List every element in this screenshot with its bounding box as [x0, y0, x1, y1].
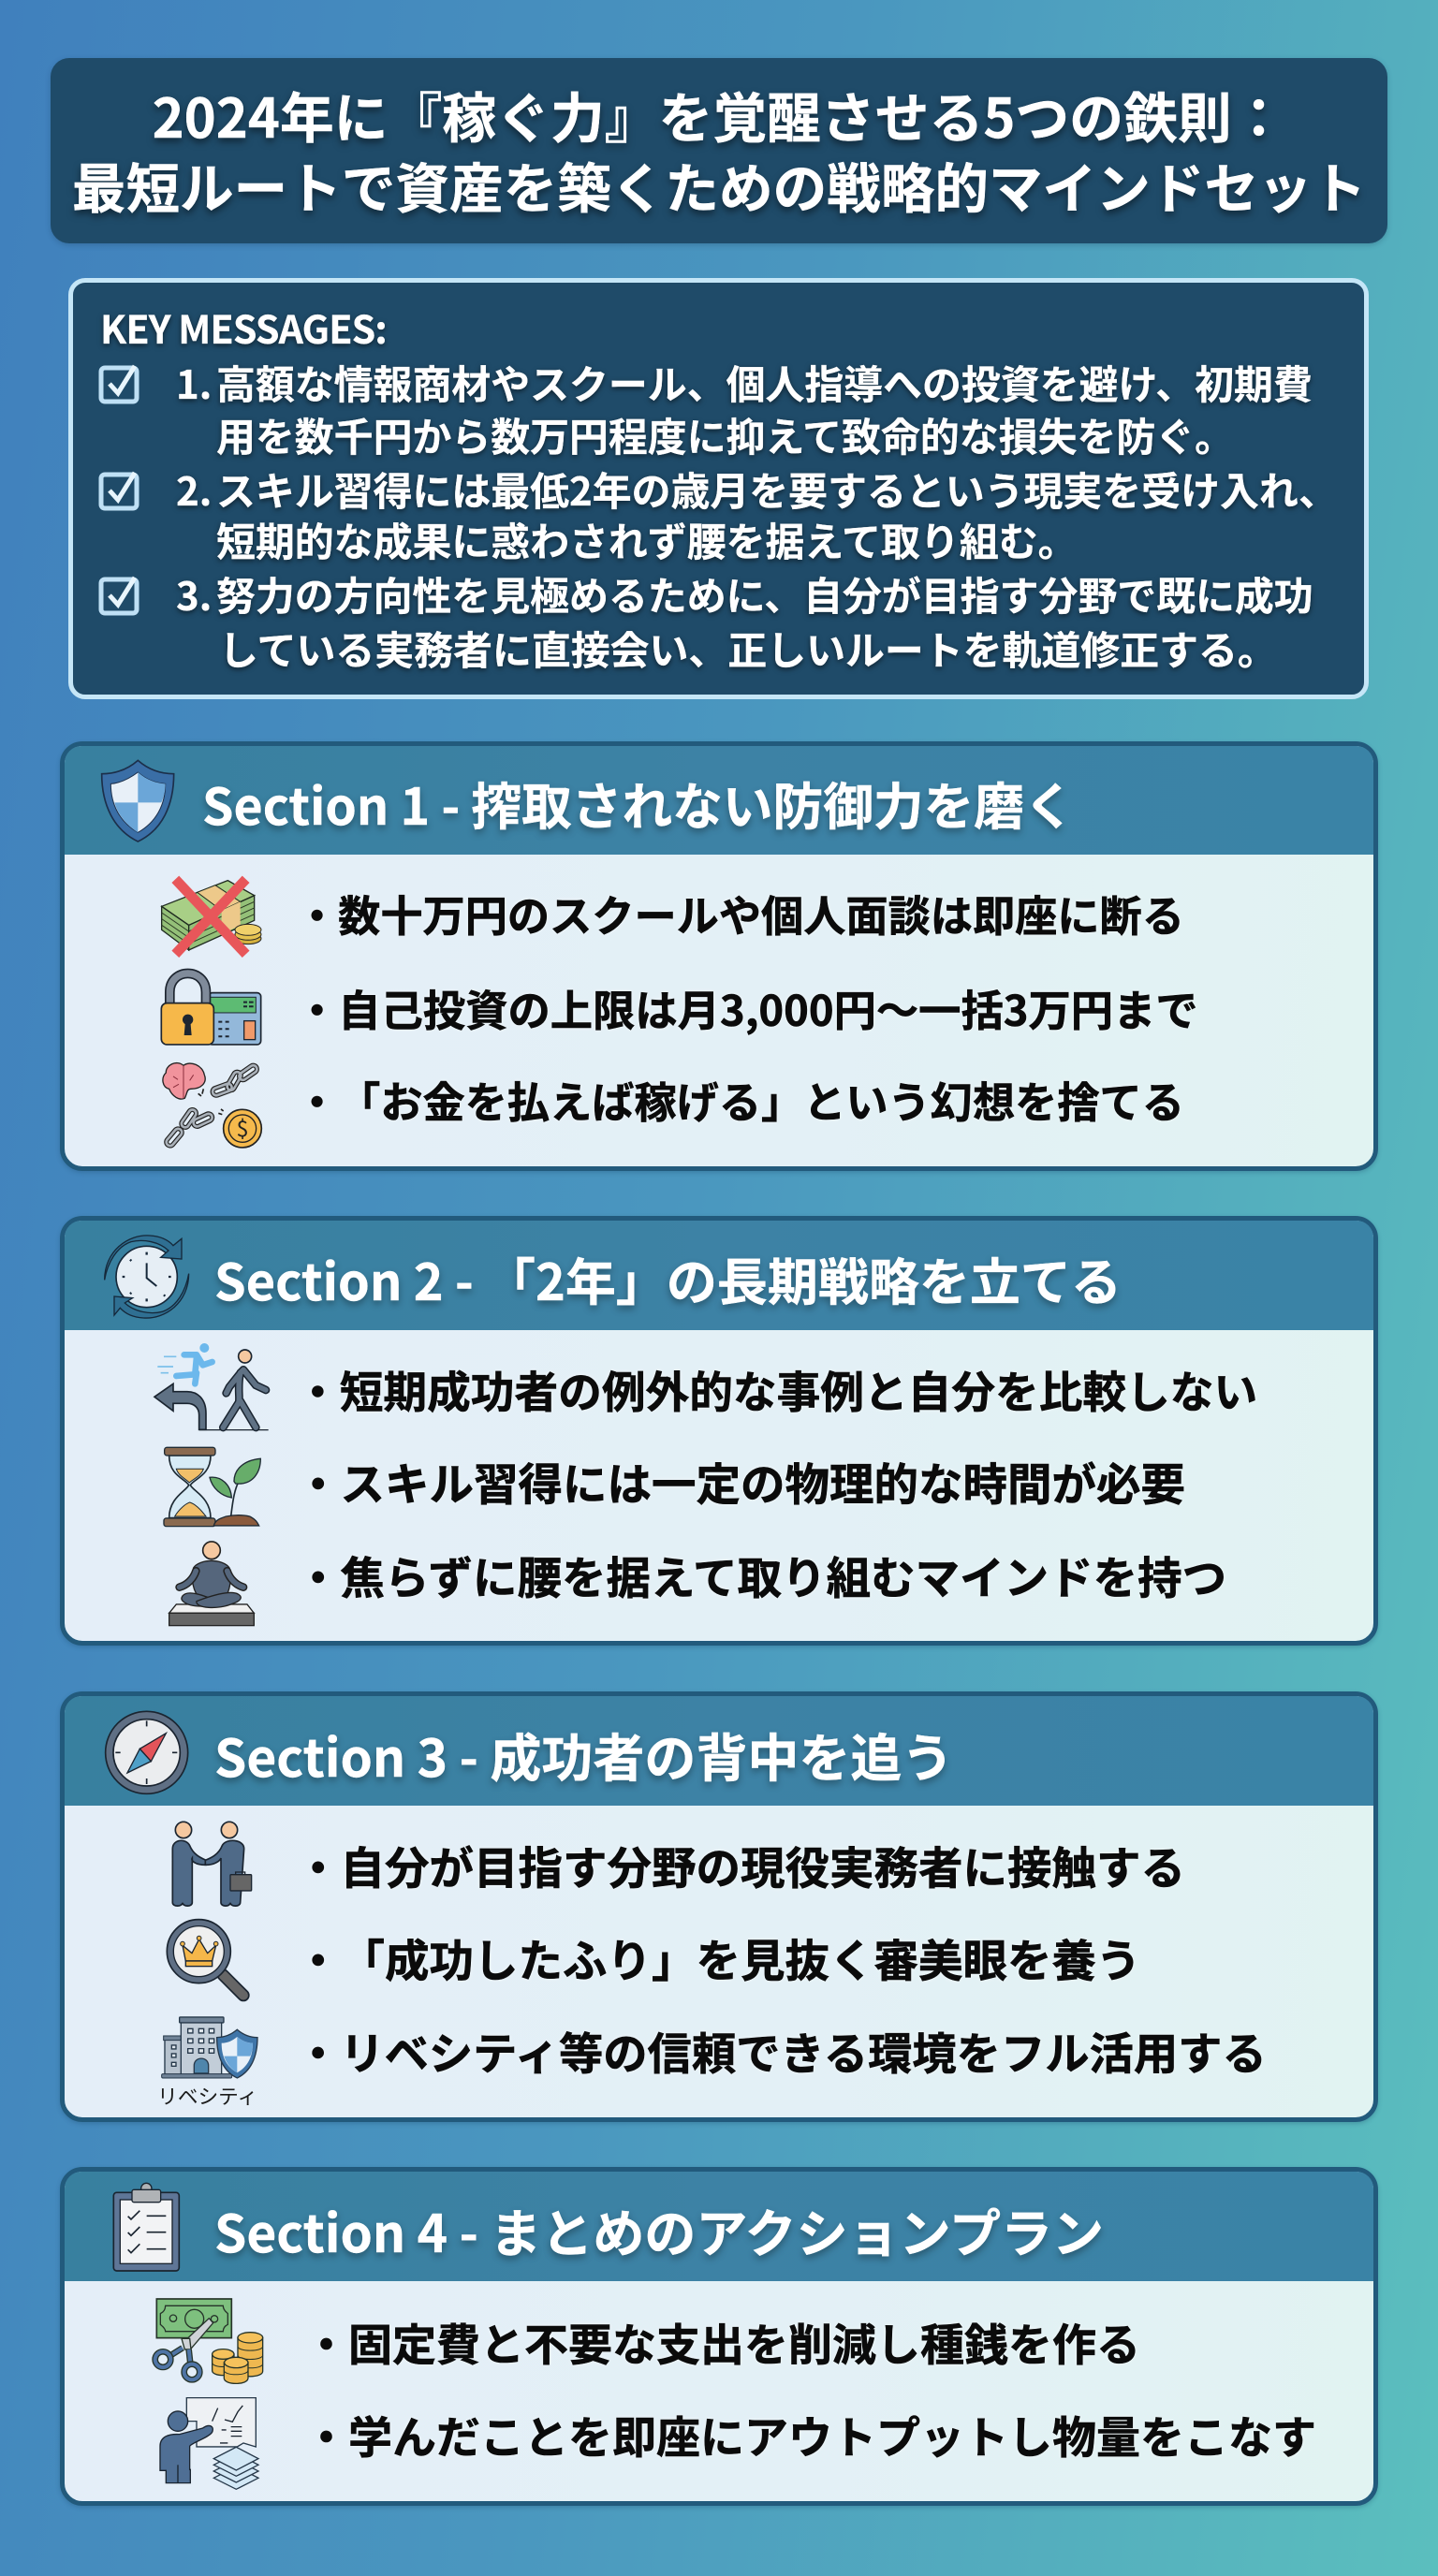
icon: scissors cutting bill and coins	[154, 2298, 262, 2383]
icon: checkbox 2	[99, 472, 139, 511]
panel: section 4	[60, 2167, 1378, 2506]
section 4 bullet 1: ・固定費と不要な支出を削減し種銭を作る	[304, 2309, 1140, 2374]
section 2 heading: Section 2 - 「2年」の長期戦略を立てる	[214, 1241, 1122, 1315]
icon: checkbox 3	[99, 577, 139, 616]
section 3 bullet 2: ・「成功したふり」を見抜く審美眼を養う	[296, 1925, 1140, 1990]
section 2 bullet 2: ・スキル習得には一定の物理的な時間が必要	[296, 1449, 1185, 1514]
message 3: 3.	[176, 565, 212, 622]
icon: brain broken chain coin	[162, 1062, 261, 1147]
message 2: スキル習得には最低2年の歳月を要するという現実を受け入れ、	[216, 461, 1338, 518]
section 2 bullet 3: ・焦らずに腰を据えて取り組むマインドを持つ	[296, 1543, 1226, 1607]
message 3	[99, 565, 1314, 677]
icon: hourglass and sprout	[163, 1447, 260, 1526]
icon: clock with arrows	[104, 1235, 188, 1318]
icon: brain broken chain coin: $	[236, 1110, 248, 1142]
key messages heading: KEY MESSAGES:	[100, 299, 387, 355]
panel: section 3	[60, 1691, 1378, 2122]
panel: section 2	[60, 1216, 1378, 1646]
title: 2024年に『稼ぐ力』を覚醒させる5つの鉄則：	[153, 75, 1285, 154]
section 3 icons	[105, 1711, 258, 2110]
icon: compass	[105, 1711, 187, 1793]
message 1: 高額な情報商材やスクール、個人指導への投資を避け、初期費	[216, 354, 1313, 411]
section 4 heading	[65, 2172, 1373, 2281]
icon: presenter and stacked documents	[159, 2397, 257, 2489]
section 2 bullet 1: ・短期成功者の例外的な事例と自分を比較しない	[296, 1358, 1257, 1421]
icon: handshake	[172, 1822, 251, 1906]
section 3 heading	[65, 1696, 1373, 1806]
message 3: 努力の方向性を見極めるために、自分が目指す分野で既に成功	[216, 565, 1313, 622]
icon: checkbox 1	[99, 365, 139, 404]
message 2: 短期的な成果に惑わされず腰を据えて取り組む。	[216, 511, 1077, 568]
section 4 bullet 2: ・学んだことを即座にアウトプットし物量をこなす	[304, 2402, 1316, 2466]
message 3: している実務者に直接会い、正しいルートを軌道修正する。	[219, 620, 1277, 677]
section 2 heading	[65, 1221, 1373, 1330]
section 1 heading	[65, 746, 1373, 855]
icon: money crossed out	[161, 879, 260, 954]
icon: shield	[101, 760, 173, 841]
title: 最短ルートで資産を築くための戦略的マインドセット	[72, 145, 1366, 224]
section 1 icons	[101, 759, 262, 1149]
icon: padlock and calculator	[161, 973, 260, 1044]
section 1 bullet 2: ・自己投資の上限は月3,000円〜一括3万円まで	[296, 977, 1198, 1039]
section 1 heading: Section 1 - 搾取されない防御力を磨く	[202, 768, 1075, 840]
section 2 icons	[104, 1235, 270, 1627]
message 2	[99, 461, 1338, 568]
section 3 bullet 3: ・リベシティ等の信頼できる環境をフル活用する	[296, 2018, 1267, 2083]
icon: magnifier with crown	[167, 1919, 242, 1995]
title	[51, 58, 1387, 243]
message 2: 2.	[176, 461, 212, 518]
section 3 heading: Section 3 - 成功者の背中を追う	[214, 1717, 953, 1792]
icon: runner walker and arrow	[154, 1342, 268, 1429]
panel: key messages	[68, 278, 1369, 699]
panel: section 1	[60, 741, 1378, 1171]
message 1: 1.	[176, 354, 212, 411]
section 3 bullet 1: ・自分が目指す分野の現役実務者に接触する	[296, 1833, 1185, 1897]
icon: clipboard checklist	[113, 2183, 179, 2270]
message 1: 用を数千円から数万円程度に抑えて致命的な損失を防ぐ。	[216, 406, 1234, 463]
section 4 heading: Section 4 - まとめのアクションプラン	[214, 2192, 1104, 2267]
section 1 bullet 1: ・数十万円のスクールや個人面談は即座に断る	[296, 884, 1184, 944]
section 4 icons	[112, 2183, 264, 2490]
icon: meditating person	[169, 1541, 254, 1625]
message 1	[99, 354, 1313, 463]
icon: building with shield and label: リベシティ	[157, 2081, 257, 2110]
section 1 bullet 3: ・「お金を払えば稼げる」という幻想を捨てる	[296, 1070, 1184, 1131]
icon: building with shield and label	[157, 2016, 257, 2110]
